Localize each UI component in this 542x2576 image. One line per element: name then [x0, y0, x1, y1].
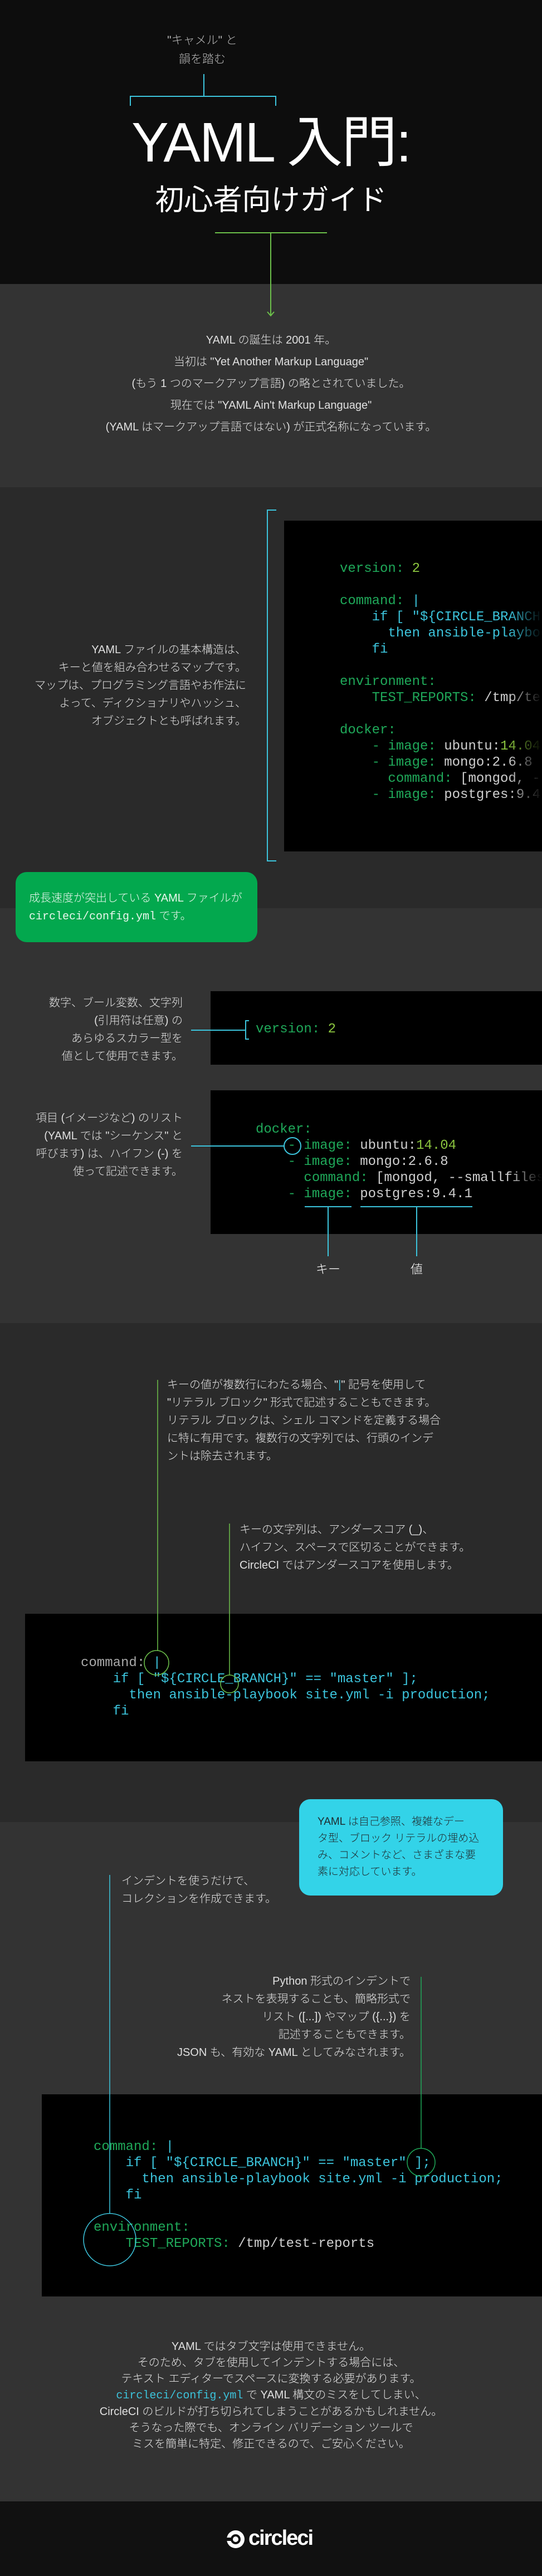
text: basic structure: オブジェクトとも呼ばれます。 [91, 715, 246, 727]
text: literal block [167, 1379, 441, 1462]
text: tabs warning: YAML ではタブ文字は使用できません。 [172, 2340, 370, 2353]
text: sequences [36, 1112, 183, 1178]
text: python style: リスト ([...]) やマップ ({...}) を [262, 2011, 411, 2023]
text: indentation [121, 1875, 276, 1905]
code block: literal command: command: | if [ "${CIRCLE_BRANCH}" == "master" ]; then ansible-playbook site.yml -i production; fi [81, 1656, 490, 1719]
text: basic structure: よって、ディクショナリやハッシュ、 [59, 697, 246, 709]
code block: command and environment [42, 2094, 542, 2296]
subtitle: camel rhyme: "キャメル" と [167, 34, 237, 47]
code block: docker [211, 1090, 542, 1234]
subtitle: beginner guide: 初心者向けガイド [155, 184, 387, 217]
connector: literal pipe [144, 1380, 169, 1675]
text: python style [177, 1975, 411, 2059]
text: key strings: キーの文字列は、アンダースコア (_)、 [240, 1524, 433, 1536]
text: sequences: 使って記述できます。 [73, 1165, 183, 1178]
text: scalars: あらゆるスカラー型を [71, 1032, 183, 1045]
intro text: 現在では "YAML Ain't Markup Language" [170, 399, 372, 412]
text: indentation: インデントを使うだけで、 [121, 1875, 255, 1887]
text: tabs warning: circleci/config.yml で YAML 構文のミスをしてしまい、 [116, 2389, 426, 2402]
text: literal block: "リテラル ブロック" 形式で記述することもできます。 [167, 1397, 436, 1409]
callout: cyan features: YAML は自己参照、複雑なデー [318, 1816, 465, 1828]
bracket: code structure [267, 510, 276, 861]
text: tabs warning: テキスト エディターでスペースに変換する必要があります。 [121, 2373, 421, 2385]
connector: underscore [221, 1524, 238, 1693]
text: basic structure: キーと値を組み合わせるマップです。 [58, 662, 246, 674]
code block: literal command [25, 1614, 542, 1761]
text: sequences: 項目 (イメージなど) のリスト [36, 1112, 183, 1124]
intro text: (もう 1 つのマークアップ言語) の略とされていました。 [132, 378, 410, 390]
footer logo: circleci [248, 2526, 312, 2550]
subtitle: camel rhyme: 韻を踏む [179, 53, 226, 66]
text: tabs warning: CircleCI のビルドが打ち切られてしまうことがあるかもしれません。 [100, 2406, 442, 2418]
intro text: (YAML はマークアップ言語ではない) が正式名称になっています。 [106, 421, 436, 433]
text: python style: 記述することもできます。 [279, 2029, 411, 2041]
callout: cyan features: タ型、ブロック リテラルの埋め込 [318, 1833, 479, 1844]
callout: cyan features: み、コメントなど、さまざまな要 [318, 1849, 476, 1861]
arrow: title down [215, 233, 327, 316]
label: key: キー [316, 1262, 340, 1276]
intro text: YAML の誕生は 2001 年。 [206, 334, 336, 346]
connector: python bracket [407, 1977, 435, 2176]
title: YAML 入門: [131, 111, 411, 174]
text: scalars: 数字、ブール変数、文字列 [49, 997, 183, 1009]
text: key strings: ハイフン、スペースで区切ることができます。 [240, 1541, 470, 1554]
text: python style: ネストを表現することも、簡略形式で [222, 1993, 411, 2005]
callout: green config note [16, 872, 257, 942]
text: basic structure: マップは、プログラミング言語やお作法に [35, 679, 246, 692]
intro text: 当初は "Yet Another Markup Language" [174, 356, 368, 368]
connector: indentation [84, 1875, 136, 2266]
text: python style: JSON も、有効な YAML としてみなされます。 [177, 2046, 411, 2059]
text: scalars: (引用符は任意) の [94, 1015, 183, 1027]
text: literal block: に特に有用です。複数行の文字列では、行頭のインデ [167, 1432, 433, 1444]
connector: scalar [191, 1021, 249, 1039]
text: literal block: キーの値が複数行にわたる場合、"|" 記号を使用して [167, 1379, 426, 1391]
text: basic structure [35, 644, 246, 727]
intro text [106, 334, 436, 433]
callout: cyan features: 素に対応しています。 [318, 1866, 422, 1878]
subtitle: camel rhyme [167, 34, 237, 66]
text: scalars [49, 997, 183, 1062]
text: literal block: ントは除去されます。 [167, 1450, 277, 1462]
text: key strings: CircleCI ではアンダースコアを使用します。 [240, 1559, 458, 1571]
text: python style: Python 形式のインデントで [272, 1975, 411, 1987]
bracket: camel [130, 74, 276, 106]
text: indentation: コレクションを作成できます。 [121, 1893, 276, 1905]
callout: green config note: 成長速度が突出している YAML ファイルが [29, 892, 242, 904]
callout: cyan features [299, 1799, 503, 1896]
text: key strings [240, 1524, 470, 1571]
text: tabs warning [100, 2340, 442, 2450]
connector: key value [305, 1207, 472, 1256]
text: tabs warning: ミスを簡単に特定、修正できるので、ご安心ください。 [132, 2438, 410, 2450]
text: sequences: 呼びます) は、ハイフン (-) を [36, 1148, 183, 1160]
text: tabs warning: そのため、タブを使用してインデントする場合には、 [138, 2357, 404, 2369]
callout: green config note: circleci/config.yml です。 [29, 910, 192, 923]
code block: version [211, 991, 542, 1065]
text: tabs warning: そうなった際でも、オンライン バリデーション ツールで [129, 2422, 413, 2434]
code block: full example [284, 521, 542, 851]
code block: command and environment: command: | if [ "${CIRCLE_BRANCH}" == "master" ]; then ansible-playbook site.yml -i production; fi environment: TEST_REPORTS: /tmp/test-reports [94, 2139, 503, 2251]
code block: version: version: 2 [256, 1022, 336, 1037]
text: literal block: リテラル ブロックは、シェル コマンドを定義する場合 [167, 1414, 441, 1427]
connector: hyphen circle [191, 1138, 301, 1154]
label: value: 値 [411, 1262, 423, 1276]
text: sequences: (YAML では "シーケンス" と [44, 1130, 183, 1142]
text: basic structure: YAML ファイルの基本構造は、 [91, 644, 246, 656]
text: scalars: 値として使用できます。 [62, 1050, 183, 1062]
